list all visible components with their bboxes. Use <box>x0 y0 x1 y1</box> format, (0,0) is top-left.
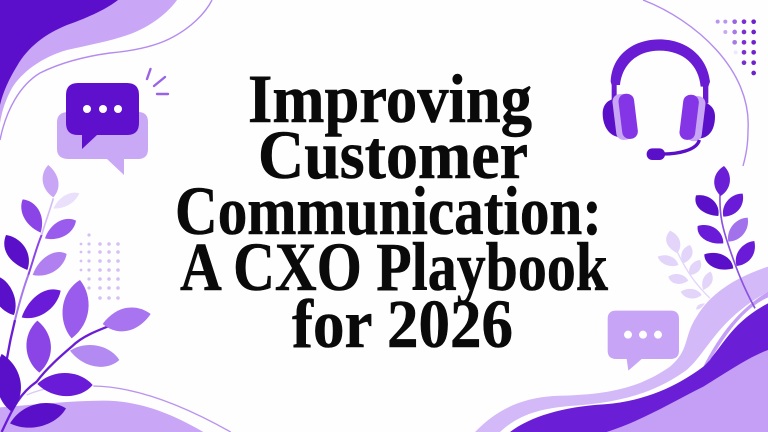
illustration: left leafy branches <box>0 165 151 432</box>
bottom-right waves <box>475 267 768 432</box>
title: Communication: <box>175 173 602 249</box>
illustration: pale leaf branch <box>658 231 713 309</box>
icon: headset <box>603 39 715 160</box>
top-left wave decoration <box>0 0 212 140</box>
top-right contour line <box>643 0 748 166</box>
icon: light chat bubble <box>608 311 679 371</box>
title: Improving <box>248 61 532 137</box>
dot grid top right <box>716 19 756 75</box>
title: Customer <box>258 117 528 193</box>
title: for 2026 <box>292 286 513 362</box>
dot grid left <box>80 233 120 300</box>
title: A CXO Playbook <box>180 229 609 305</box>
bottom-left hill and contour line <box>0 386 231 432</box>
illustration: dark leaf branch <box>695 166 755 308</box>
title <box>175 61 609 362</box>
icon: chat bubbles with typing dots <box>57 69 168 175</box>
